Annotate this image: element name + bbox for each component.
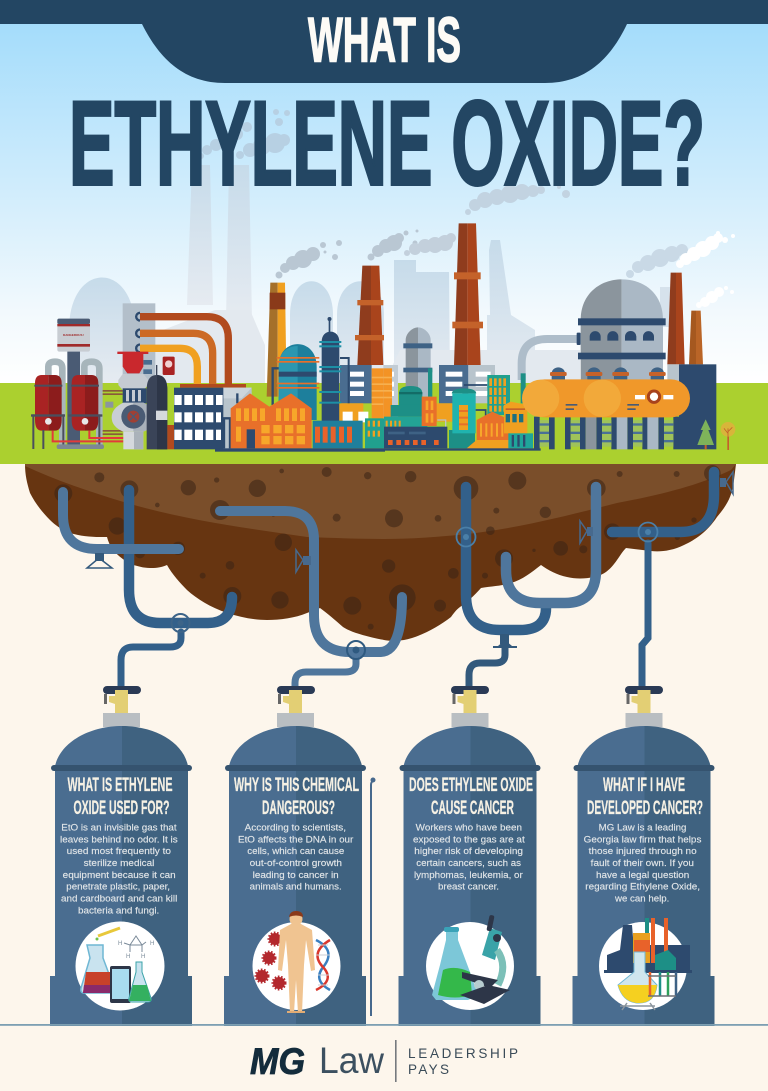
soil island [25, 464, 736, 641]
teal block [313, 418, 384, 448]
side sprinkler [580, 521, 593, 543]
body text: out-of-control growth [250, 858, 342, 869]
gray dome tower [403, 327, 432, 397]
panel: tank 3 does it cause cancer [398, 686, 540, 1026]
brown chimney [355, 266, 384, 365]
side sprinkler [720, 472, 733, 494]
body text [238, 822, 354, 893]
icon: chemistry flasks: H [126, 954, 130, 960]
heading: WHY IS THIS CHEMICAL [234, 775, 359, 796]
small gray building [383, 365, 398, 418]
footer logo [250, 1040, 518, 1082]
tall striped chimney [267, 283, 287, 397]
gray stack with pipes [123, 303, 228, 385]
factory: right half [383, 223, 735, 451]
header banner [0, 0, 768, 83]
body text: certain cancers, such as [416, 858, 521, 869]
orange buildings [339, 368, 384, 430]
body text [413, 822, 525, 893]
body text: higher risk of developing [414, 846, 523, 857]
body text: equipment because it can [63, 870, 176, 881]
valve [456, 528, 476, 546]
body text: EtO is an invisible gas that [61, 822, 177, 834]
teal amber tower [449, 385, 487, 448]
smoke plumes [198, 109, 735, 308]
body text: MG Law is a leading [599, 822, 686, 834]
water tower: DANGEROUS ! [63, 333, 84, 337]
footer bar [0, 1024, 768, 1026]
body text: leaves behind no odor. It is [60, 834, 178, 845]
heading: DANGEROUS? [262, 798, 335, 819]
panel: tank 4 what if developed cancer [572, 686, 714, 1026]
teal dome cluster [384, 386, 447, 448]
footer logo: MG [250, 1041, 305, 1082]
icon: chemistry flasks [76, 922, 164, 1010]
body text: Workers who have been [416, 822, 522, 834]
body text: cells, which can cause [247, 846, 344, 857]
icon: chemistry flasks: H [141, 954, 145, 960]
body text: those injured through no [589, 846, 697, 857]
gray u pipes [48, 362, 99, 447]
red tanks [31, 375, 104, 449]
body text: EtO affects the DNA in our [238, 834, 354, 845]
body text: we can help. [614, 894, 669, 904]
sky [0, 20, 768, 385]
icon: factory and lab glassware [599, 918, 692, 1010]
sprinkler [87, 553, 112, 568]
heading [234, 775, 359, 819]
body text: Georgia law firm that helps [584, 834, 702, 845]
body text: penetrate plastic, paper, [66, 882, 170, 893]
water tower [57, 319, 90, 448]
amber block [436, 403, 456, 422]
heading: CAUSE CANCER [431, 798, 514, 819]
body text: fault of their own. If you [591, 858, 694, 869]
pipes to tank 2 [220, 511, 402, 688]
icon: chemistry flasks: H [118, 941, 122, 947]
heading [68, 775, 172, 819]
footer logo: PAYS [408, 1062, 449, 1077]
title: what is: WHAT IS [308, 6, 461, 76]
heading: WHAT IS ETHYLENE [68, 775, 172, 796]
small autumn tree [721, 422, 735, 450]
teal office tower [487, 375, 510, 415]
icon: flask and microscope [426, 915, 514, 1010]
red pipes [53, 431, 123, 441]
support ladders [534, 417, 679, 449]
stray thin pipe [370, 778, 376, 1016]
large dome reactor [578, 279, 666, 380]
blue gray building [340, 358, 372, 420]
valve [638, 522, 658, 542]
orange small factory [467, 412, 516, 448]
body text: regarding Ethylene Oxide, [585, 882, 700, 893]
body text [60, 822, 178, 916]
heading: OXIDE USED FOR? [74, 798, 170, 819]
body text: and cardboard and can kill [61, 894, 177, 904]
pipes to tank 1 [63, 490, 232, 688]
panel: tank 1 what is it used for [50, 686, 192, 1026]
body text: animals and humans. [250, 882, 342, 893]
footer logo: Law [319, 1040, 384, 1081]
valve [172, 614, 190, 632]
ground: green grass [0, 383, 768, 464]
pipes to tank 3 [456, 487, 596, 688]
gray connecting pipe [521, 333, 581, 403]
body text: bacteria and fungi. [78, 905, 159, 916]
pine tree [697, 419, 714, 449]
heading: WHAT IF I HAVE [603, 775, 685, 796]
ground line [215, 448, 385, 452]
white-windowed building [174, 384, 252, 449]
vents on tank [550, 367, 666, 380]
side sprinkler [296, 550, 311, 572]
panel: tank 2 why dangerous [224, 686, 366, 1026]
big brown chimney [452, 223, 483, 365]
pipes on grass [103, 390, 123, 435]
chimneys right [667, 273, 703, 364]
pipes to tank 4 [612, 472, 733, 688]
dark column tower [319, 317, 341, 422]
orange factory house [231, 393, 312, 448]
body text: exposed to the gas are at [413, 834, 525, 845]
factory: left half [31, 266, 385, 452]
lower sprinkler [493, 634, 517, 648]
dark gas bottle [147, 357, 175, 449]
heading: DOES ETHYLENE OXIDE [409, 775, 533, 796]
footer logo: LEADERSHIP [408, 1046, 518, 1061]
body text: leading to cancer in [253, 870, 339, 881]
body text: breast cancer. [438, 882, 499, 893]
body text: have a legal question [596, 870, 689, 881]
body text: sterilize medical [84, 858, 154, 869]
soil spots [54, 465, 721, 630]
icon: human body, virus, DNA [252, 911, 340, 1013]
processing machine [112, 352, 155, 449]
orange horizontal tank [522, 379, 690, 417]
body text: lymphomas, leukemia, or [414, 870, 524, 881]
navy block [667, 364, 716, 449]
amber shed [504, 402, 533, 448]
ground line [384, 448, 541, 451]
body text: used most frequently to [67, 846, 171, 857]
blue gray twin building [439, 365, 495, 403]
heading [587, 775, 703, 819]
body text [584, 822, 702, 904]
teal dome tank [273, 344, 319, 420]
heading [409, 775, 533, 819]
icon: chemistry flasks: H [150, 941, 154, 947]
body text: According to scientists, [245, 822, 346, 834]
background: ghost factory silhouettes [69, 165, 670, 383]
valve [347, 641, 365, 659]
